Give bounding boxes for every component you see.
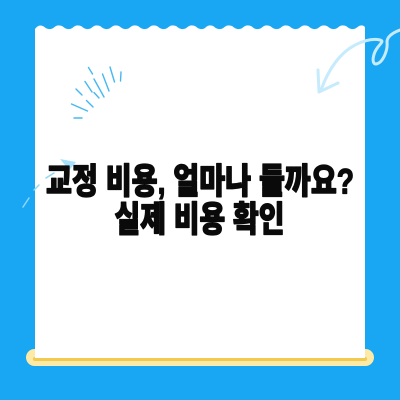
icon: radiating sparkle lines [72,67,121,118]
title [46,162,354,240]
icon: curly arrow top right [318,30,400,92]
bottom yellow bar [26,349,374,366]
icon: paper plane with dashed trail [23,159,76,207]
title: 실제 비용 확인 [114,200,284,240]
wavy white card [35,25,365,358]
